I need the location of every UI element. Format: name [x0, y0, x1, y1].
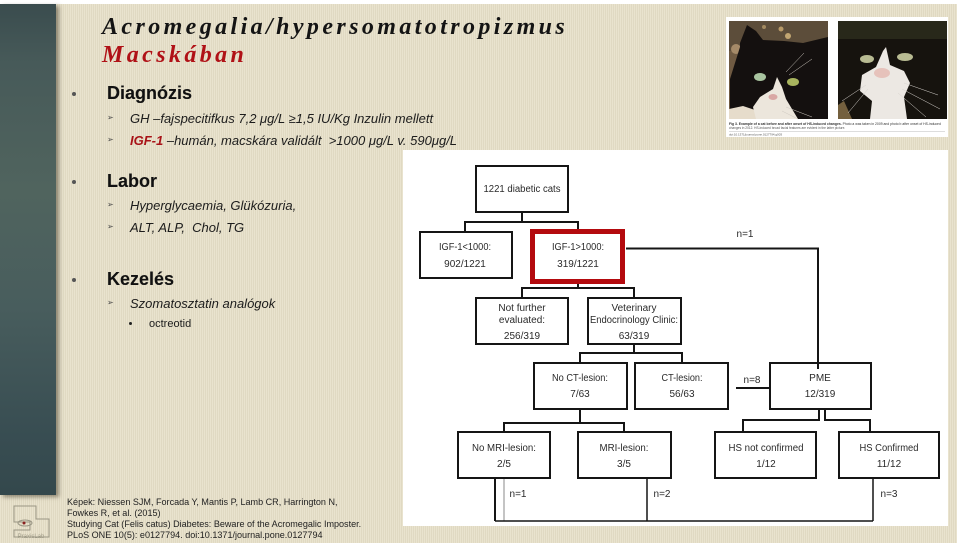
count labels: n=3 — [881, 489, 898, 500]
section: Diagnózis: Diagnózis — [107, 83, 192, 103]
references: Képek: Niessen SJM, Forcada Y, Mantis P, Lamb CR, Harrington N, — [67, 497, 338, 507]
box: HS Confirmed — [839, 432, 939, 478]
section: Kezelés: Szomatosztatin analógok — [130, 296, 275, 311]
section: Labor — [72, 171, 296, 235]
box: No MRI-lesion: No MRI-lesion: — [472, 443, 536, 454]
photo A: cat before — [729, 21, 828, 119]
box: MRI-lesion: 3/5 — [617, 459, 631, 470]
icon: PraxisLab logo: PraxisLab — [18, 534, 45, 540]
box: HS Confirmed: HS Confirmed — [860, 443, 918, 454]
box: No CT-lesion: No CT-lesion: — [552, 373, 608, 384]
section: Diagnózis: ➢ — [107, 135, 114, 144]
box: Not further evaluated: Not further — [498, 303, 546, 314]
box: IGF-1<1000: 902/1221 — [444, 259, 486, 270]
section: Labor: ALT, ALP, Chol, TG — [130, 220, 244, 235]
box: No MRI-lesion — [458, 432, 550, 478]
box: CT-lesion: 56/63 — [669, 389, 695, 400]
box: No CT-lesion: 7/63 — [570, 389, 590, 400]
box: No CT-lesion — [534, 363, 627, 409]
photo B: cat after — [838, 21, 947, 119]
box: Veterinary Endocrinology Clinic: 63/319 — [619, 331, 650, 342]
cat photos figure — [726, 17, 948, 137]
box: HS not confirmed: HS not confirmed — [728, 443, 804, 454]
section: Kezelés: ➢ — [107, 298, 114, 307]
title: Macskában — [102, 42, 247, 68]
section: Kezelés — [72, 269, 276, 330]
section: Diagnózis: ➢ — [107, 113, 114, 122]
box: 1221 diabetic cats — [476, 166, 568, 212]
count labels: n=1 — [510, 489, 527, 500]
section: Labor: Labor — [107, 171, 157, 191]
box: MRI-lesion — [578, 432, 671, 478]
box: Veterinary Endocrinology Clinic: Veterinary — [611, 303, 657, 314]
title: Acromegalia/hypersomatotropizmus — [102, 14, 568, 40]
section: Labor: ➢ — [107, 200, 114, 209]
box: 1221 diabetic cats: 1221 diabetic cats — [484, 184, 560, 195]
references — [67, 497, 361, 540]
connector lines — [465, 212, 873, 521]
box: Not further evaluated — [476, 298, 568, 344]
section: Diagnózis: GH –fajspecitifkus 7,2 μg/L ≥1,5 IU/Kg Inzulin mellett — [130, 111, 433, 126]
figure caption: Fig 3. Example of a cat before and after onset of HS-induced changes. Photo a was taken in 2009 and photo b after onset of HS-induced — [729, 122, 941, 126]
box: HS Confirmed: 11/12 — [877, 459, 902, 470]
box: Veterinary Endocrinology Clinic: Endocrinology Clinic: — [590, 315, 678, 326]
box: Not further evaluated: 256/319 — [504, 331, 541, 342]
references: Studying Cat (Felis catus) Diabetes: Beware of the Acromegalic Imposter. — [67, 519, 361, 529]
figure caption — [729, 122, 945, 136]
section: Diagnózis — [72, 83, 457, 148]
box: HS not confirmed — [715, 432, 816, 478]
count labels: n=1 — [737, 229, 754, 240]
section: Diagnózis: IGF-1 –humán, macskára validált >1000 μg/L v. 590μg/L — [130, 133, 457, 148]
count labels: n=8 — [744, 375, 761, 386]
figure caption: changes in 2012. HS-induced broad facial features are evident in the latter picture. — [729, 126, 845, 130]
box: PME — [770, 350, 871, 409]
box: PME: PME — [809, 373, 831, 384]
box: IGF-1>1000 highlighted — [532, 232, 622, 282]
box: CT-lesion — [635, 363, 728, 409]
section: Kezelés: Kezelés — [107, 269, 174, 289]
box: Veterinary Endocrinology Clinic — [588, 298, 681, 344]
title — [100, 14, 568, 68]
count labels: n=2 — [654, 489, 671, 500]
flowchart panel — [403, 150, 948, 526]
box: IGF-1>1000 highlighted: IGF-1>1000: — [552, 242, 604, 253]
count labels — [510, 229, 898, 500]
box: No MRI-lesion: 2/5 — [497, 459, 511, 470]
box: PME: 12/319 — [805, 389, 836, 400]
box: Not further evaluated: evaluated: — [499, 315, 545, 326]
box: HS not confirmed: 1/12 — [756, 459, 776, 470]
box: CT-lesion: CT-lesion: — [662, 373, 702, 384]
references: Fowkes R, et al. (2015) — [67, 508, 161, 518]
references: PLoS ONE 10(5): e0127794. doi:10.1371/journal.pone.0127794 — [67, 530, 323, 540]
section: Kezelés: octreotid — [149, 318, 191, 330]
section: Labor: ➢ — [107, 222, 114, 231]
box: IGF-1>1000 highlighted: 319/1221 — [557, 259, 599, 270]
icon: PraxisLab logo — [14, 506, 50, 540]
box: IGF-1<1000: IGF-1<1000: — [439, 242, 491, 253]
sidebar — [0, 4, 56, 495]
box: MRI-lesion: MRI-lesion: — [600, 443, 648, 454]
box: IGF-1<1000 — [420, 232, 512, 278]
figure caption: doi:10.1371/journal.pone.0127794.g003 — [729, 132, 782, 136]
section: Labor: Hyperglycaemia, Glükózuria, — [130, 198, 296, 213]
